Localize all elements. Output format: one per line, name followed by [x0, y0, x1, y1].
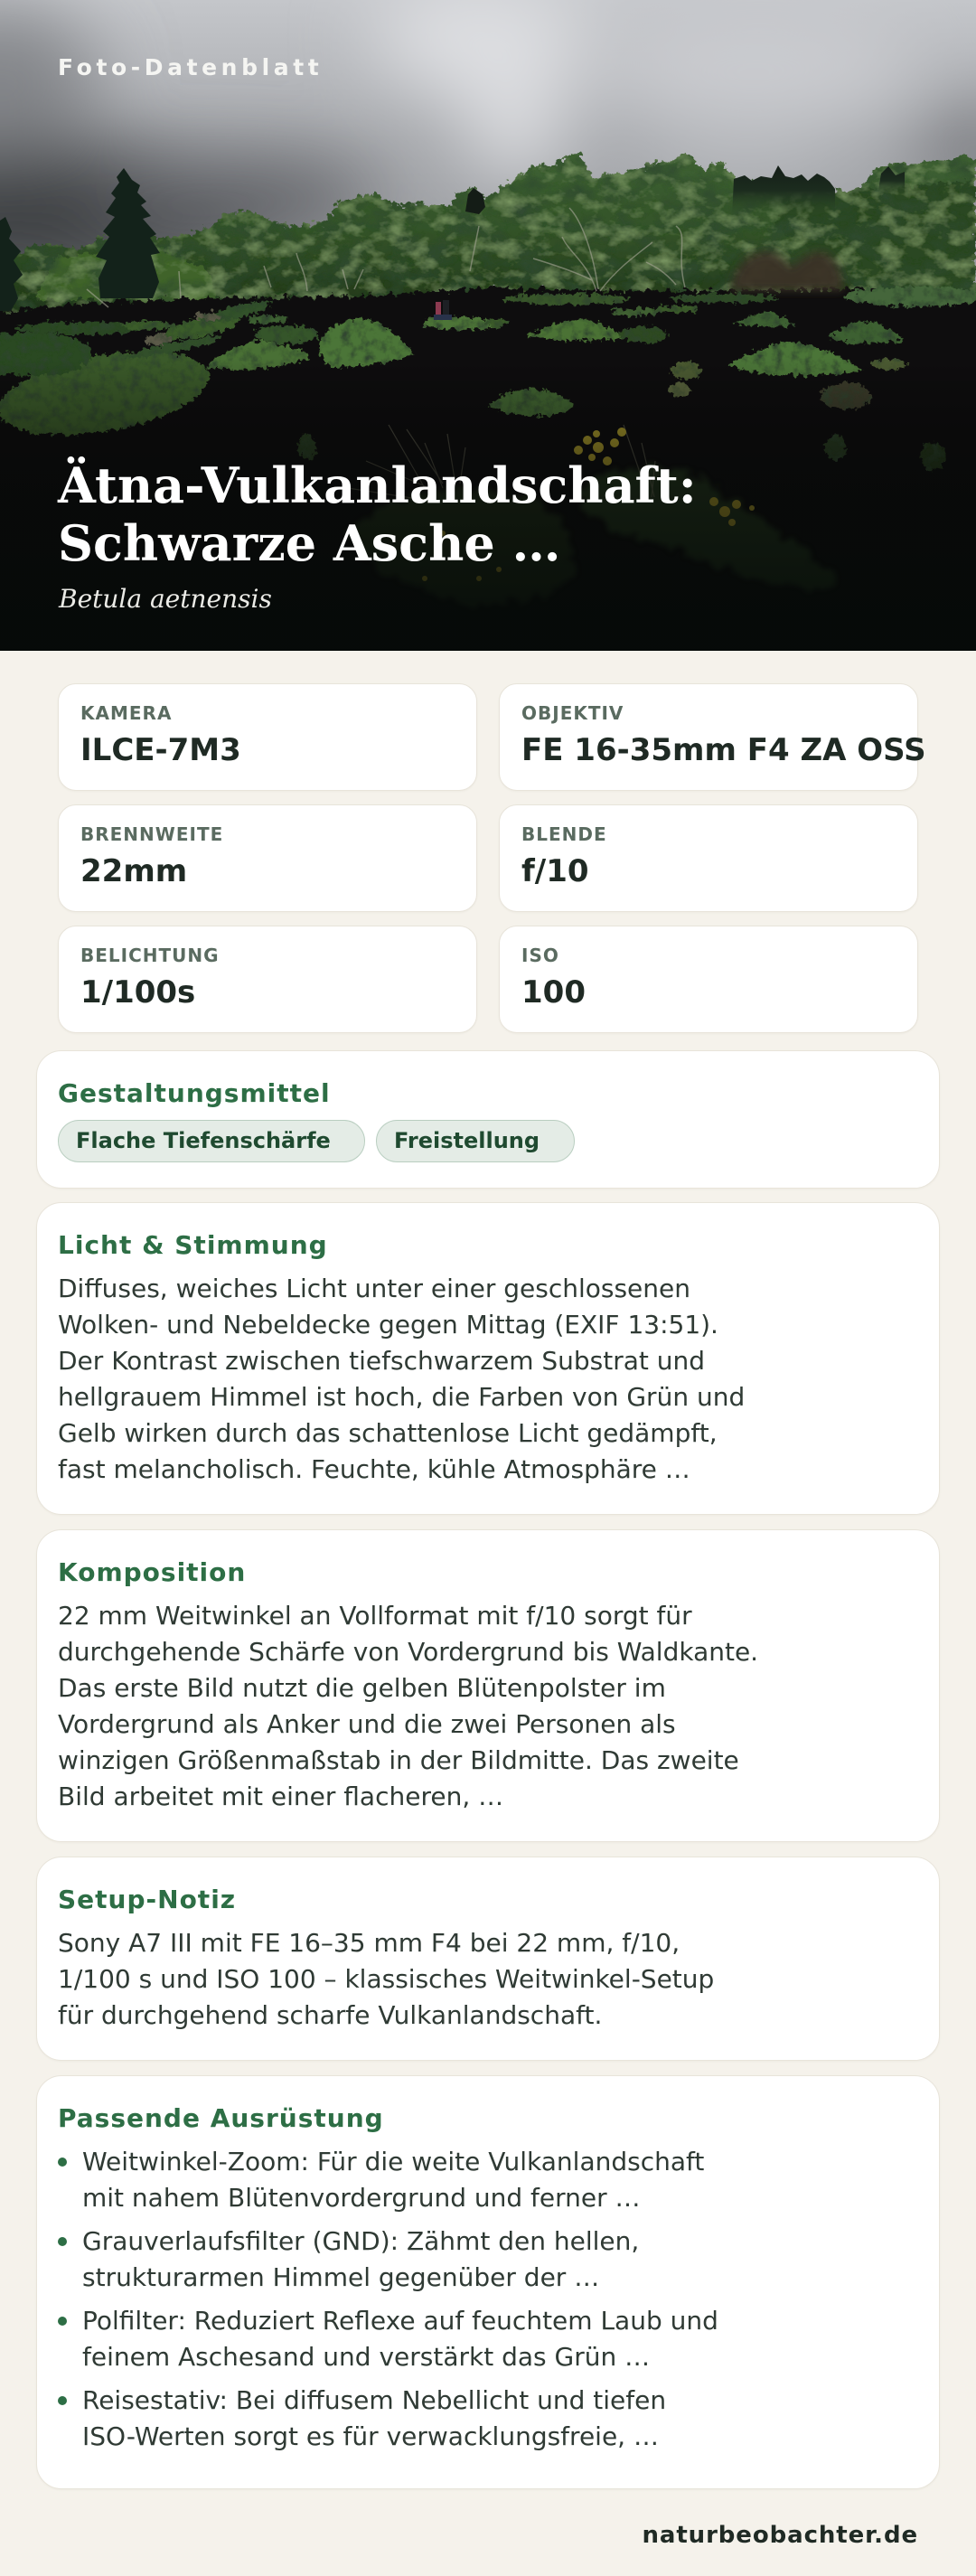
spec card: Objektiv [499, 683, 918, 791]
panel: Komposition [36, 1529, 940, 1842]
title: Schwarze Asche … [58, 514, 560, 572]
brown shrub [730, 251, 844, 291]
hero photo: Etna volcanic landscape [0, 0, 976, 651]
spec card: Blende: f/10 [521, 853, 589, 889]
body text: winzigen Größenmaßstab in der Bildmitte. Das zweite [58, 1745, 739, 1775]
list item: Grauverlaufsfilter [58, 2226, 639, 2292]
body text: Gelb wirken durch das schattenlose Licht gedämpft, [58, 1418, 718, 1448]
list item: Weitwinkel-Zoom: Weitwinkel-Zoom: Für die weite Vulkanlandschaft [82, 2147, 704, 2176]
spec card: Kamera: ILCE-7M3 [80, 732, 241, 768]
heading: Setup-Notiz [58, 1885, 236, 1914]
spec card: Kamera: KAMERA [80, 702, 172, 724]
list item: Polfilter: feinem Aschesand und verstärkt das Grün … [82, 2342, 650, 2372]
list item: Weitwinkel-Zoom: mit nahem Blütenvordergrund und ferner … [82, 2183, 641, 2213]
title [58, 456, 697, 572]
body text: 22 mm Weitwinkel an Vollformat mit f/10 sorgt für [58, 1601, 692, 1631]
panel: Gestaltungsmittel [36, 1050, 940, 1189]
spec card: ISO: 100 [521, 974, 586, 1011]
list item: Reisestativ: ISO-Werten sorgt es für verwacklungsfreie, … [82, 2421, 659, 2451]
body text: Wolken- und Nebeldecke gegen Mittag (EXIF 13:51). [58, 1310, 718, 1340]
chip: Freistellung [376, 1120, 575, 1162]
body text [58, 1928, 714, 2030]
body text: 1/100 s und ISO 100 – klassisches Weitwinkel-Setup [58, 1964, 714, 1994]
spec card: Brennweite [58, 804, 477, 912]
spec card: Blende: BLENDE [521, 823, 607, 845]
list item: Polfilter: Polfilter: Reduziert Reflexe auf feuchtem Laub und [82, 2306, 718, 2336]
body text: hellgrauem Himmel ist hoch, die Farben von Grün und [58, 1382, 745, 1412]
pine trees [0, 165, 905, 311]
spec card: Blende [499, 804, 918, 912]
spec card: ISO: ISO [521, 945, 559, 966]
spec card: Brennweite: 22mm [80, 853, 187, 889]
spec card: Belichtung: 1/100s [80, 974, 195, 1011]
spec card: ISO [499, 926, 918, 1033]
chip: Flache Tiefenschärfe [58, 1120, 365, 1162]
ground [0, 286, 976, 651]
eyebrow: Foto-Datenblatt [58, 54, 323, 80]
dark overlay [0, 0, 976, 651]
spec card: Belichtung [58, 926, 477, 1033]
spec card: Kamera [58, 683, 477, 791]
chip: Freistellung: Freistellung [394, 1128, 540, 1153]
spec card: Belichtung: BELICHTUNG [80, 945, 220, 966]
heading: Komposition [58, 1557, 246, 1587]
birch trunks [87, 208, 685, 307]
people [434, 300, 452, 320]
heading: Licht & Stimmung [58, 1230, 328, 1260]
spec card: Objektiv: OBJEKTIV [521, 702, 624, 724]
panel: Licht & Stimmung [36, 1202, 940, 1515]
subtitle: Betula aetnensis [59, 584, 272, 614]
spec card: Brennweite: BRENNWEITE [80, 823, 223, 845]
body text: Das erste Bild nutzt die gelben Blütenpolster im [58, 1673, 666, 1703]
heading: Gestaltungsmittel [58, 1078, 331, 1108]
body text: Bild arbeitet mit einer flacheren, … [58, 1782, 503, 1811]
body text: fast melancholisch. Feuchte, kühle Atmosphäre … [58, 1454, 690, 1484]
heading: Passende Ausrüstung [58, 2103, 384, 2133]
forest line [0, 151, 976, 312]
grass tufts [0, 287, 976, 471]
chip: Flache Tiefenschärfe: Flache Tiefenschärfe [76, 1128, 331, 1153]
body text: durchgehende Schärfe von Vordergrund bis Waldkante. [58, 1637, 758, 1667]
panel: Setup-Notiz [36, 1857, 940, 2061]
title: Ätna-Vulkanlandschaft: [58, 456, 697, 514]
body text [58, 1274, 745, 1484]
body text [58, 1601, 758, 1811]
body text: für durchgehend scharfe Vulkanlandschaft. [58, 2000, 602, 2030]
list item: Reisestativ: Reisestativ: Bei diffusem Nebellicht und tiefen [82, 2385, 666, 2415]
spec card: Objektiv: FE 16-35mm F4 ZA OSS [521, 732, 926, 768]
list item: Grauverlaufsfilter: Grauverlaufsfilter (GND): Zähmt den hellen, [82, 2226, 639, 2256]
panel: Passende Ausrüstung [36, 2075, 940, 2489]
footer brand: naturbeobachter.de [642, 2522, 918, 2549]
body text: Diffuses, weiches Licht unter einer geschlossenen [58, 1274, 690, 1303]
body text: Sony A7 III mit FE 16–35 mm F4 bei 22 mm, f/10, [58, 1928, 680, 1958]
list item: Weitwinkel-Zoom [58, 2147, 704, 2213]
body text: Vordergrund als Anker und die zwei Personen als [58, 1709, 676, 1739]
foreground shrub with yellow blossoms [348, 425, 832, 606]
list item: Reisestativ [58, 2385, 666, 2451]
sky [0, 0, 976, 307]
body text: Der Kontrast zwischen tiefschwarzem Substrat und [58, 1346, 705, 1376]
list item: Polfilter [58, 2306, 718, 2372]
list item: Grauverlaufsfilter: strukturarmen Himmel gegenüber der … [82, 2262, 599, 2292]
